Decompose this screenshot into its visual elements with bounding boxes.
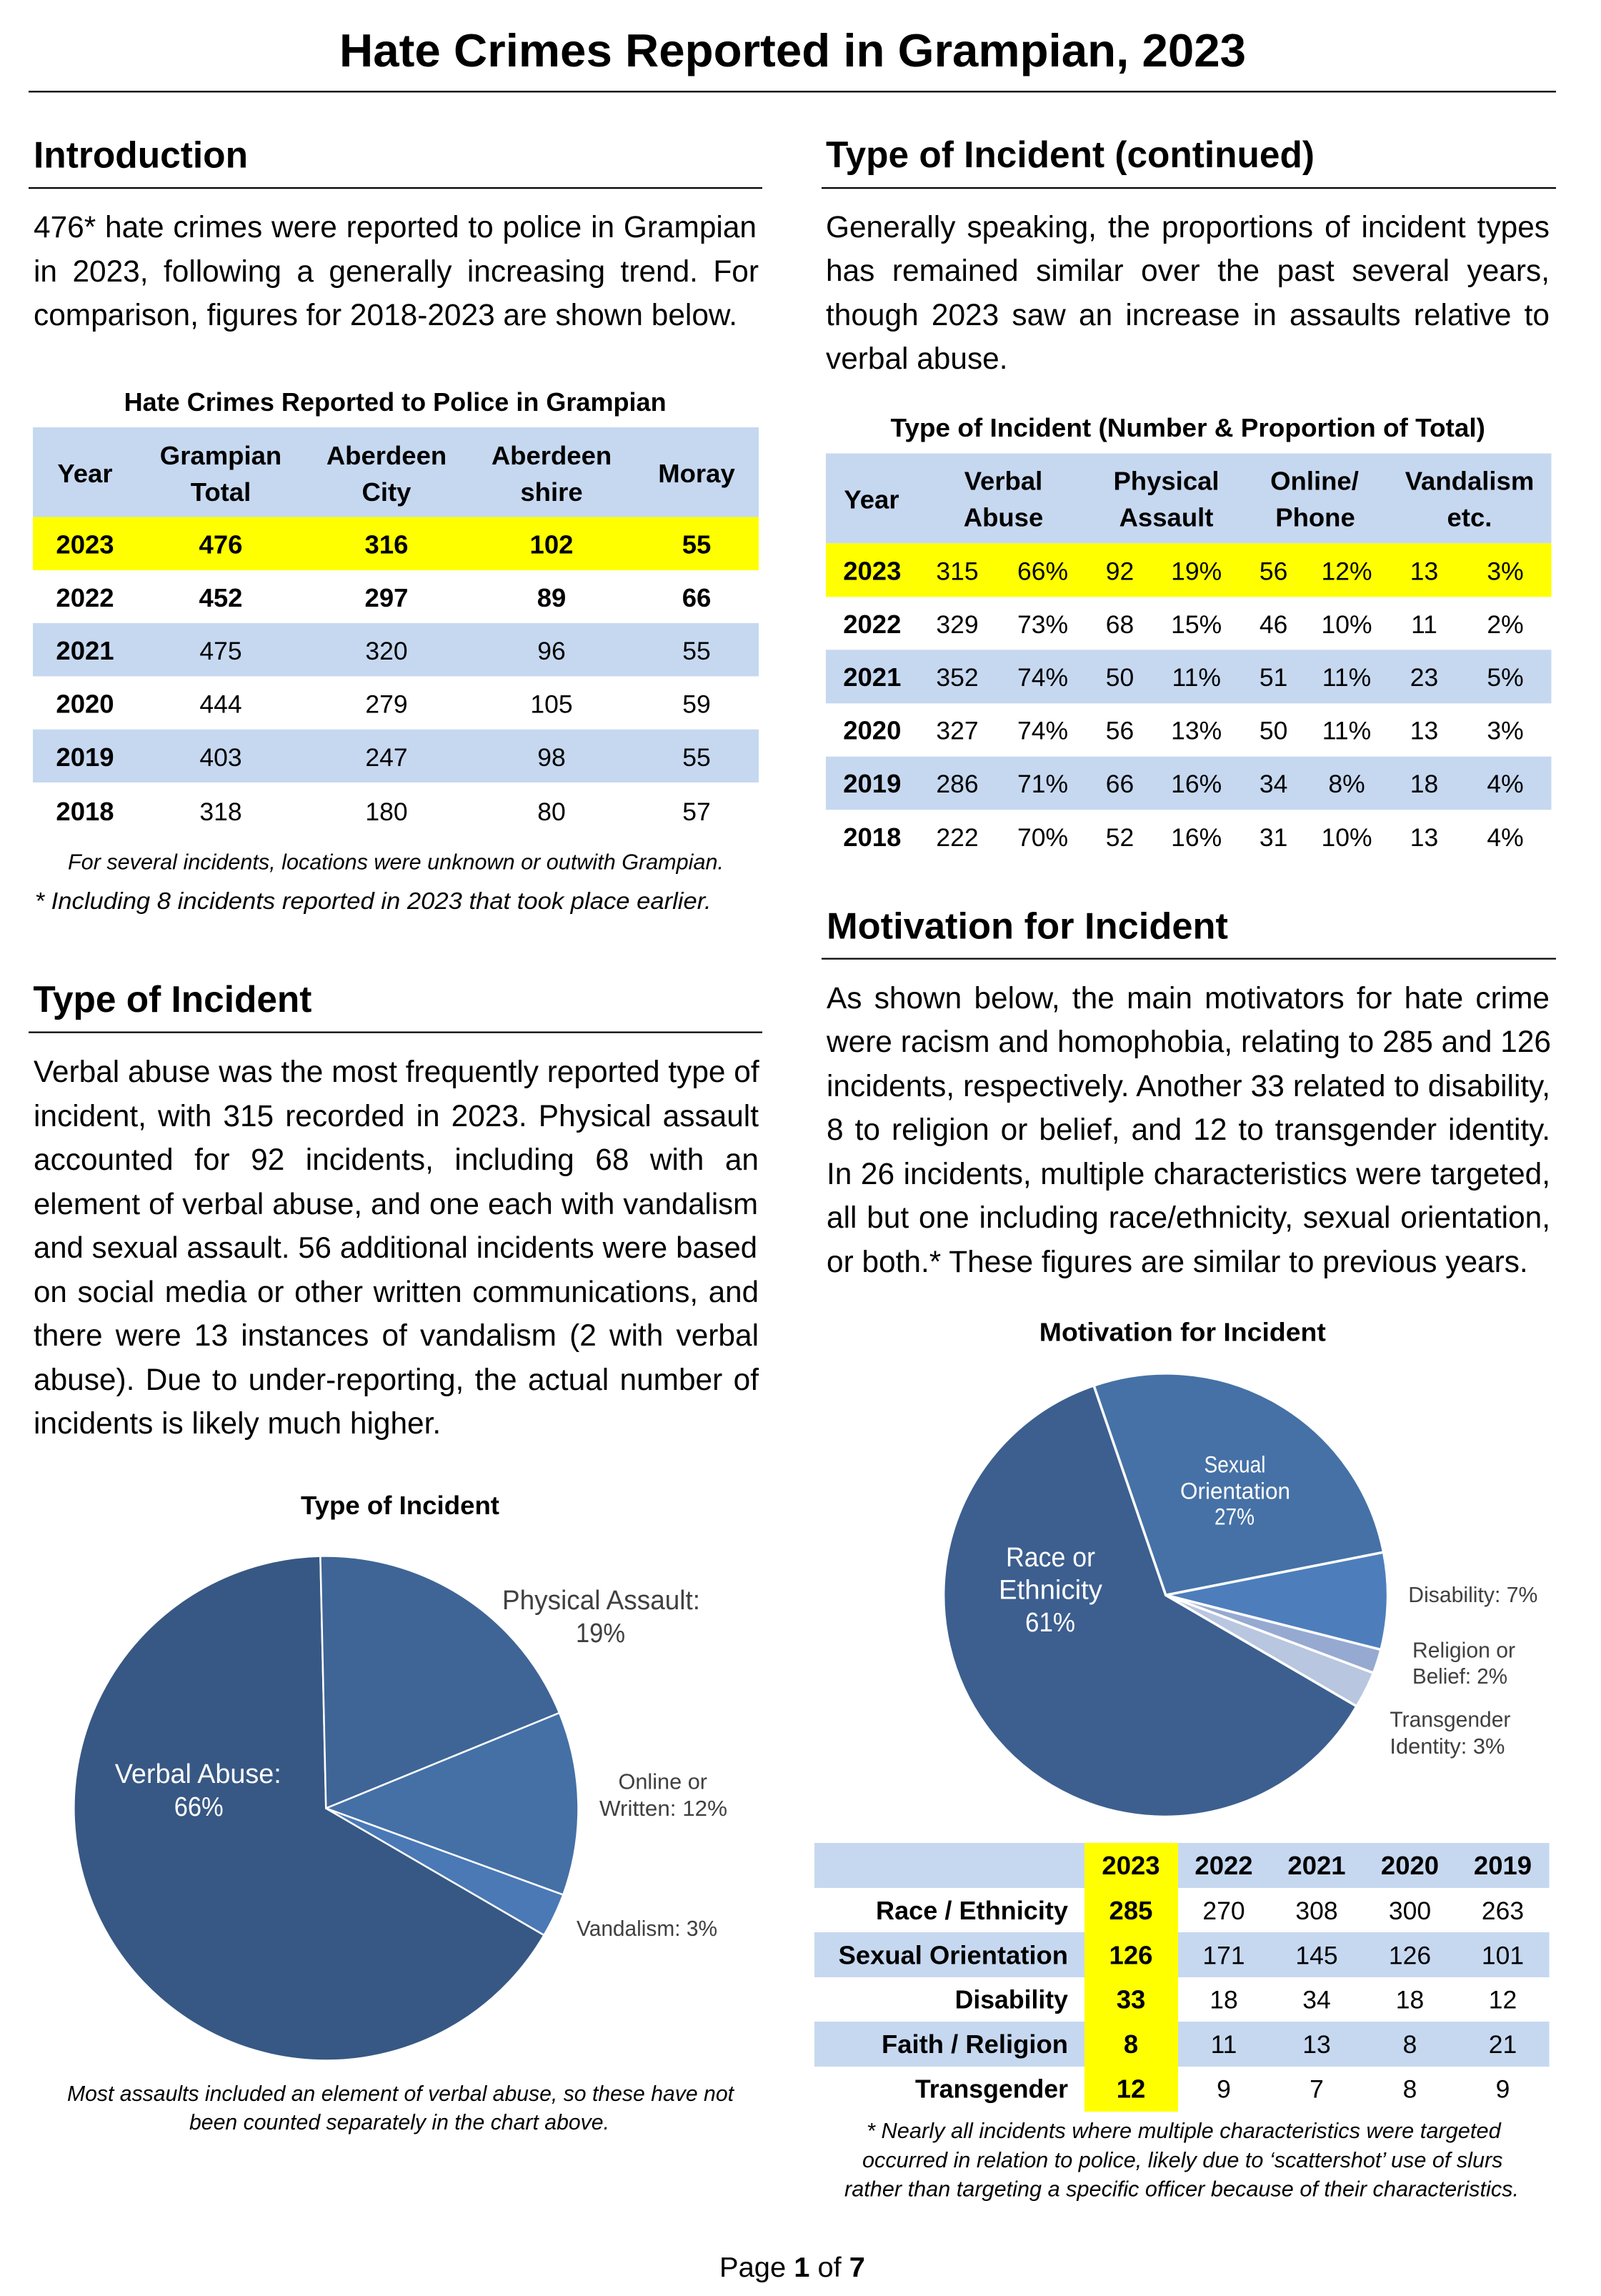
text block: type of incident paragraph: Verbal abuse was the most frequently reported type of bbox=[34, 1055, 759, 1088]
label: verbal abuse: 66% bbox=[174, 1792, 224, 1822]
heading: introduction: Introduction bbox=[34, 134, 248, 176]
row 2020: 59 bbox=[682, 690, 711, 719]
label: sexual orientation: Sexual bbox=[1205, 1451, 1266, 1477]
row 2021: 50 bbox=[1106, 663, 1134, 692]
row 2018: 31 bbox=[1260, 823, 1287, 852]
row 2018: 80 bbox=[537, 797, 566, 826]
row: race / ethnicity: 263 bbox=[1482, 1897, 1524, 1925]
row 2023: 315 bbox=[936, 557, 979, 586]
row 2018: 16% bbox=[1171, 823, 1222, 852]
text block: type of incident paragraph: incidents is likely much higher. bbox=[34, 1406, 441, 1440]
row 2018 bbox=[843, 823, 1524, 852]
note: assaults and verbal abuse: Most assaults included an element of verbal abuse, so these have not bbox=[67, 2081, 734, 2106]
row: sexual orientation: Sexual Orientation bbox=[839, 1940, 1068, 1969]
table header: Online/ bbox=[1270, 466, 1359, 495]
heading: motivation for incident: Motivation for Incident bbox=[827, 906, 1228, 948]
note: assaults and verbal abuse: been counted separately in the chart above. bbox=[189, 2109, 609, 2135]
table header: Phone bbox=[1275, 502, 1355, 532]
row 2019: 403 bbox=[199, 743, 242, 772]
text block: type of incident paragraph: and sexual assault. 56 additional incidents were based bbox=[34, 1231, 757, 1264]
row: faith / religion: 8 bbox=[1403, 2030, 1417, 2059]
table header: Year bbox=[57, 459, 113, 488]
label: online or written: Written: 12% bbox=[599, 1796, 727, 1821]
row 2019 bbox=[843, 769, 1524, 798]
row 2018: 2018 bbox=[56, 797, 114, 826]
row 2018: 13 bbox=[1410, 823, 1438, 852]
row 2018 bbox=[56, 797, 711, 826]
label: race or ethnicity bbox=[999, 1543, 1102, 1638]
row: sexual orientation: 126 bbox=[1109, 1940, 1152, 1969]
table header: Vandalism bbox=[1405, 466, 1534, 495]
note: multiple characteristics: rather than targeting a specific officer because of their characteristics. bbox=[844, 2177, 1519, 2201]
row 2021: 55 bbox=[682, 637, 711, 665]
row 2022: 11 bbox=[1411, 610, 1437, 639]
heading: type of incident: Type of Incident bbox=[33, 979, 311, 1020]
panel: introduction bbox=[29, 134, 769, 914]
row 2023: 476 bbox=[199, 530, 242, 559]
text block: motivation paragraph: In 26 incidents, multiple characteristics were targeted, bbox=[827, 1157, 1550, 1191]
table header: Abuse bbox=[964, 502, 1043, 532]
row 2022: 297 bbox=[365, 583, 408, 612]
label: race or ethnicity: 61% bbox=[1025, 1608, 1075, 1638]
text block: type of incident paragraph: there were 13 instances of vandalism (2 with verbal bbox=[34, 1318, 759, 1352]
label: physical assault: 19% bbox=[576, 1619, 625, 1649]
table title: number and proportion: Type of Incident (Number & Proportion of Total) bbox=[890, 413, 1485, 442]
row 2023: 2023 bbox=[843, 557, 901, 586]
row 2020 bbox=[843, 716, 1524, 745]
row: transgender: 8 bbox=[1403, 2075, 1417, 2104]
label: physical assault: Physical Assault: bbox=[502, 1586, 700, 1616]
row 2018: 57 bbox=[682, 797, 711, 826]
table header: Year bbox=[844, 484, 899, 515]
table header: etc. bbox=[1447, 502, 1492, 532]
row: disability: 34 bbox=[1302, 1985, 1331, 2014]
row: transgender bbox=[915, 2074, 1510, 2104]
note: assaults and verbal abuse bbox=[67, 2081, 734, 2135]
row 2018: 318 bbox=[199, 797, 242, 826]
heading: type of incident continued: Type of Incident (continued) bbox=[826, 134, 1315, 176]
row 2020: 105 bbox=[530, 690, 573, 719]
row 2018: 70% bbox=[1017, 823, 1068, 852]
row 2020: 444 bbox=[199, 690, 242, 719]
row 2023: 66% bbox=[1017, 557, 1068, 586]
row 2020: 279 bbox=[365, 690, 408, 719]
table header: 2019 bbox=[1474, 1851, 1532, 1880]
note: earlier incidents: * Including 8 incidents reported in 2023 that took place earlier. bbox=[35, 888, 712, 914]
row: race / ethnicity: 300 bbox=[1389, 1897, 1431, 1925]
text block: motivation paragraph: incidents, respectively. Another 33 related to disability, bbox=[827, 1069, 1550, 1103]
label: verbal abuse bbox=[115, 1759, 281, 1822]
row: race / ethnicity: 308 bbox=[1295, 1897, 1338, 1925]
row 2023: 2023 bbox=[56, 530, 114, 559]
row 2021: 475 bbox=[199, 637, 242, 665]
text block: continued paragraph: though 2023 saw an increase in assaults relative to bbox=[826, 298, 1550, 332]
row: sexual orientation: 171 bbox=[1202, 1941, 1245, 1969]
row 2020: 13% bbox=[1171, 717, 1222, 745]
panel: motivation for incident bbox=[814, 906, 1562, 2201]
row 2019: 247 bbox=[365, 743, 408, 772]
table header: 2020 bbox=[1381, 1851, 1439, 1880]
row: faith / religion: Faith / Religion bbox=[882, 2029, 1068, 2059]
table header bbox=[1102, 1851, 1532, 1880]
row 2023 bbox=[56, 530, 711, 559]
pie chart: type of incident bbox=[74, 1556, 727, 2061]
row 2023: 56 bbox=[1260, 557, 1287, 586]
chart title: motivation for incident: Motivation for Incident bbox=[1039, 1318, 1326, 1346]
row 2022: 66 bbox=[682, 583, 711, 612]
panel: type of incident continued bbox=[822, 134, 1562, 852]
row 2019: 18 bbox=[1410, 770, 1438, 798]
label: race or ethnicity: Race or bbox=[1006, 1543, 1095, 1573]
row 2018: 2018 bbox=[843, 823, 901, 852]
row 2021: 2021 bbox=[56, 636, 114, 665]
table header: Aberdeen bbox=[326, 441, 447, 470]
row 2023: 316 bbox=[365, 530, 408, 559]
row: faith / religion: 11 bbox=[1211, 2030, 1237, 2059]
row 2022: 2022 bbox=[843, 610, 901, 639]
label: physical assault bbox=[502, 1586, 700, 1649]
row 2022: 89 bbox=[537, 583, 566, 612]
row 2023: 12% bbox=[1321, 557, 1372, 586]
row: transgender: Transgender bbox=[915, 2074, 1068, 2104]
row 2023: 3% bbox=[1487, 557, 1524, 586]
row 2023: 55 bbox=[682, 530, 711, 559]
label: transgender identity bbox=[1390, 1707, 1510, 1759]
label: online or written bbox=[599, 1769, 727, 1821]
row: race / ethnicity: 270 bbox=[1202, 1897, 1245, 1925]
text block: motivation paragraph: 8 to religion or belief, and 12 to transgender identity. bbox=[827, 1113, 1550, 1146]
row: sexual orientation: 145 bbox=[1295, 1941, 1338, 1969]
table header: City bbox=[362, 477, 412, 507]
row 2020: 2020 bbox=[843, 716, 901, 745]
table header: Verbal bbox=[964, 466, 1042, 495]
row 2023: 92 bbox=[1106, 557, 1134, 586]
row 2019: 34 bbox=[1260, 770, 1287, 798]
row 2019: 2019 bbox=[56, 742, 114, 772]
table: incident types by year bbox=[826, 453, 1552, 852]
row: faith / religion: 21 bbox=[1489, 2030, 1517, 2059]
row 2019: 16% bbox=[1171, 770, 1222, 798]
text block: motivation paragraph: As shown below, the main motivators for hate crime bbox=[827, 981, 1550, 1015]
table header bbox=[57, 441, 735, 507]
row: transgender: 9 bbox=[1496, 2075, 1510, 2104]
row 2019: 2019 bbox=[843, 769, 901, 798]
row 2020: 74% bbox=[1017, 717, 1068, 745]
row 2022: 68 bbox=[1106, 610, 1134, 639]
row 2018: 180 bbox=[365, 797, 408, 826]
row 2020: 327 bbox=[936, 717, 979, 745]
label: religion or belief bbox=[1412, 1638, 1515, 1689]
row: faith / religion bbox=[882, 2029, 1517, 2059]
row: race / ethnicity bbox=[876, 1896, 1524, 1925]
row 2019: 98 bbox=[537, 743, 566, 772]
row 2021: 51 bbox=[1260, 663, 1287, 692]
table title: hate crimes reported: Hate Crimes Reported to Police in Grampian bbox=[124, 387, 667, 417]
row: race / ethnicity: 285 bbox=[1109, 1896, 1152, 1925]
row 2019: 55 bbox=[682, 743, 711, 772]
row: race / ethnicity: Race / Ethnicity bbox=[876, 1896, 1069, 1925]
row: sexual orientation bbox=[839, 1940, 1524, 1969]
row 2022: 2% bbox=[1487, 610, 1524, 639]
table header: Aberdeen bbox=[492, 441, 612, 470]
note: multiple characteristics bbox=[844, 2118, 1519, 2201]
row 2019: 8% bbox=[1328, 770, 1365, 798]
label: disability: Disability: 7% bbox=[1408, 1582, 1537, 1607]
row 2021: 11% bbox=[1172, 663, 1221, 692]
row 2021: 96 bbox=[537, 637, 566, 665]
row: sexual orientation: 101 bbox=[1482, 1941, 1524, 1969]
row 2019: 66 bbox=[1106, 770, 1134, 798]
text block: motivation paragraph: were racism and homophobia, relating to 285 and 126 bbox=[827, 1025, 1551, 1058]
row 2021: 2021 bbox=[843, 662, 901, 692]
label: sexual orientation: Orientation bbox=[1180, 1479, 1290, 1504]
row 2018: 10% bbox=[1321, 823, 1372, 852]
page number: Page 1 of 7 bbox=[719, 2252, 865, 2283]
row 2018: 52 bbox=[1106, 823, 1134, 852]
row 2022: 46 bbox=[1260, 610, 1287, 639]
row 2021: 23 bbox=[1410, 663, 1438, 692]
row: faith / religion: 13 bbox=[1302, 2030, 1331, 2059]
label: transgender identity: Transgender bbox=[1390, 1707, 1510, 1732]
table header: 2023 bbox=[1102, 1851, 1160, 1880]
text block: motivation paragraph: all but one including race/ethnicity, sexual orientation, bbox=[827, 1201, 1550, 1234]
table header: 2021 bbox=[1287, 1851, 1346, 1880]
table header: Total bbox=[191, 477, 251, 507]
row 2022: 73% bbox=[1017, 610, 1068, 639]
note: multiple characteristics: * Nearly all incidents where multiple characteristics were targeted bbox=[867, 2118, 1502, 2143]
row 2021: 320 bbox=[365, 637, 408, 665]
row: disability: 33 bbox=[1117, 1985, 1145, 2014]
table: motivation by year bbox=[814, 1843, 1550, 2112]
row: disability: Disability bbox=[955, 1985, 1069, 2014]
text block: motivation paragraph bbox=[827, 976, 1562, 1291]
row 2021: 5% bbox=[1487, 663, 1524, 692]
table header: 2022 bbox=[1194, 1851, 1253, 1880]
row: faith / religion: 8 bbox=[1124, 2029, 1138, 2059]
label: sexual orientation: 27% bbox=[1215, 1504, 1255, 1529]
label: transgender identity: Identity: 3% bbox=[1390, 1734, 1505, 1759]
row 2019: 286 bbox=[936, 770, 979, 798]
label: vandalism: Vandalism: 3% bbox=[577, 1916, 717, 1941]
text block: motivation paragraph: or both.* These figures are similar to previous years. bbox=[827, 1245, 1528, 1278]
table header: Grampian bbox=[160, 441, 281, 470]
row 2019: 71% bbox=[1017, 770, 1068, 798]
row 2020 bbox=[56, 689, 711, 719]
text block: continued paragraph: has remained similar over the past several years, bbox=[826, 254, 1550, 287]
label: online or written: Online or bbox=[619, 1769, 707, 1794]
row 2021 bbox=[843, 662, 1524, 692]
table header: Assault bbox=[1119, 502, 1213, 532]
row 2021: 11% bbox=[1322, 663, 1371, 692]
table: hate crimes by area bbox=[33, 427, 759, 826]
text block: continued paragraph bbox=[826, 205, 1562, 384]
row 2020: 11% bbox=[1322, 717, 1371, 745]
row 2019 bbox=[56, 742, 711, 772]
table header: shire bbox=[520, 477, 583, 507]
note: unknown locations: For several incidents, locations were unknown or outwith Grampian. bbox=[68, 849, 724, 875]
row 2020: 3% bbox=[1487, 717, 1524, 745]
text block: introduction paragraph: 476* hate crimes were reported to police in Grampian bbox=[34, 210, 757, 244]
text block: continued paragraph: verbal abuse. bbox=[826, 342, 1008, 375]
panel: type of incident bbox=[29, 979, 769, 2135]
text block: introduction paragraph bbox=[34, 205, 769, 341]
text block: type of incident paragraph: incident, with 315 recorded in 2023. Physical assault bbox=[34, 1099, 759, 1133]
row 2023: 19% bbox=[1171, 557, 1222, 586]
row: sexual orientation: 126 bbox=[1389, 1941, 1431, 1969]
row 2019: 4% bbox=[1487, 770, 1524, 798]
label: verbal abuse: Verbal Abuse: bbox=[115, 1759, 281, 1789]
row 2022 bbox=[56, 583, 711, 612]
pie chart: motivation for incident bbox=[944, 1373, 1537, 1817]
row: disability bbox=[955, 1985, 1517, 2014]
text block: introduction paragraph: comparison, figures for 2018-2023 are shown below. bbox=[34, 298, 737, 332]
label: race or ethnicity: Ethnicity bbox=[999, 1575, 1102, 1605]
row 2022: 2022 bbox=[56, 583, 114, 612]
row: disability: 12 bbox=[1489, 1985, 1517, 2014]
table header: Moray bbox=[658, 459, 735, 488]
row 2022: 15% bbox=[1171, 610, 1222, 639]
row 2022: 452 bbox=[199, 583, 242, 612]
text block: type of incident paragraph: abuse). Due to under-reporting, the actual number of bbox=[34, 1363, 759, 1396]
note: multiple characteristics: occurred in relation to police, likely due to ‘scattershot’ use of slurs bbox=[862, 2147, 1503, 2172]
row 2023: 102 bbox=[530, 530, 573, 559]
row: transgender: 12 bbox=[1117, 2074, 1145, 2104]
row: transgender: 9 bbox=[1217, 2075, 1231, 2104]
label: sexual orientation bbox=[1180, 1451, 1290, 1529]
text block: type of incident paragraph: accounted for 92 incidents, including 68 with an bbox=[34, 1143, 759, 1176]
row 2020: 50 bbox=[1260, 717, 1287, 745]
text block: continued paragraph: Generally speaking, the proportions of incident types bbox=[826, 210, 1550, 244]
row 2020: 13 bbox=[1410, 717, 1438, 745]
table header: Physical bbox=[1113, 466, 1220, 495]
table header bbox=[844, 466, 1534, 532]
row 2022: 329 bbox=[936, 610, 979, 639]
row 2023: 13 bbox=[1410, 557, 1438, 586]
row 2021: 74% bbox=[1017, 663, 1068, 692]
text block: type of incident paragraph: on social media or other written communications, and bbox=[34, 1275, 759, 1308]
row: disability: 18 bbox=[1210, 1985, 1238, 2014]
text block: introduction paragraph: in 2023, following a generally increasing trend. For bbox=[34, 254, 759, 288]
row 2021: 352 bbox=[936, 663, 979, 692]
row 2022 bbox=[843, 610, 1524, 639]
row 2022: 10% bbox=[1321, 610, 1372, 639]
text block: type of incident paragraph bbox=[34, 1050, 769, 1450]
row 2018: 222 bbox=[936, 823, 979, 852]
row 2023 bbox=[843, 557, 1524, 586]
title: Hate Crimes Reported in Grampian, 2023 bbox=[339, 24, 1246, 76]
row 2021 bbox=[56, 636, 711, 665]
row: disability: 18 bbox=[1396, 1985, 1424, 2014]
row 2020: 56 bbox=[1106, 717, 1134, 745]
row 2018: 4% bbox=[1487, 823, 1524, 852]
text block: type of incident paragraph: element of verbal abuse, and one each with vandalism bbox=[34, 1187, 758, 1221]
row: transgender: 7 bbox=[1310, 2075, 1324, 2104]
label: religion or belief: Religion or bbox=[1412, 1638, 1515, 1663]
row 2020: 2020 bbox=[56, 689, 114, 719]
chart title: type of incident: Type of Incident bbox=[301, 1491, 499, 1520]
label: religion or belief: Belief: 2% bbox=[1412, 1664, 1507, 1689]
